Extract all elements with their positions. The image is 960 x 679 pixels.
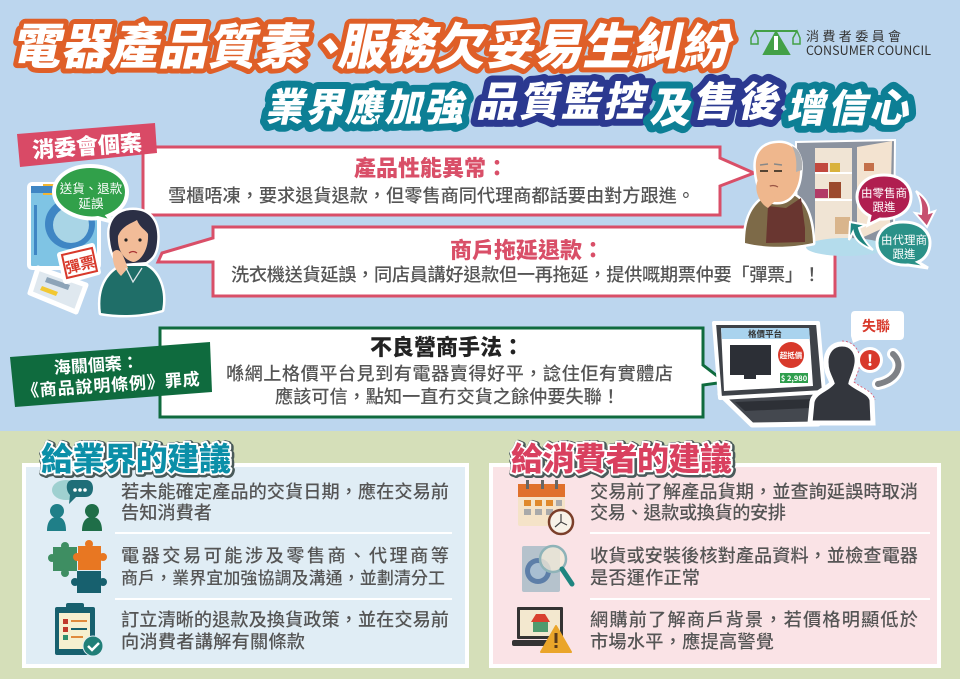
advice text 2: 電器交易可能涉及零售商、代理商等 [121, 542, 449, 568]
advice text 1: 若未能確定產品的交貨日期，應在交易前 [121, 478, 449, 504]
advice text 4: 交易、退款或換貨的安排 [590, 499, 786, 525]
advice text 6 [590, 606, 918, 654]
illustration: open fridge [796, 140, 895, 256]
heading: advice for the trade: 給業界的建議 [41, 434, 231, 480]
arrow: agent to retailer [849, 222, 873, 250]
advice text 4: 交易前了解產品貨期，並查詢延誤時取消 [590, 478, 918, 504]
title: 電器產品質素、服務欠妥易生糾紛 [8, 9, 741, 79]
advice text 5: 是否運作正常 [590, 564, 700, 590]
advice text 1 [121, 478, 449, 525]
illustration: washing machine [29, 184, 99, 268]
icon: checklist [55, 603, 103, 656]
speech bubble: retailer follow up: 跟進 [872, 199, 896, 215]
speech bubble: delayed delivery [54, 166, 127, 222]
illustration: laptop with price platform: 超抵價 [780, 350, 803, 361]
illustration: stamp and cheque [30, 246, 98, 312]
logo: consumer council: CONSUMER COUNCIL [806, 40, 931, 59]
subtitle [262, 69, 917, 134]
callout: bad trade practice [160, 328, 725, 417]
speech bubble: delayed delivery: 延誤 [78, 193, 104, 212]
advice text 6: 網購前了解商戶背景，若價格明顯低於 [590, 606, 918, 632]
illustration: stamp and cheque: 彈票 [63, 251, 97, 278]
heading: advice for the trade: 給業界的建議 [42, 435, 232, 481]
advice text 2 [121, 542, 449, 589]
illustration: silhouette person [810, 341, 875, 423]
illustration: worried old man [745, 143, 813, 247]
subtitle: 業界應加強 [262, 76, 473, 133]
panel: advice for the trade [24, 434, 467, 666]
ribbon: customs case: 海關個案： [53, 348, 139, 379]
advice text 3: 訂立清晰的退款及換貨政策，並在交易前 [121, 606, 449, 632]
callout: delayed refund: 洗衣機送貨延誤，同店員講好退款但一再拖延，提供嘅期票仲要「彈票」！ [231, 261, 821, 287]
icon: alert and phone [857, 347, 898, 384]
icon: washer and magnifier [522, 546, 572, 592]
arrow: retailer to agent [915, 191, 935, 227]
callout: bad trade practice: 喺網上格價平台見到有電器賣得好平，諗住佢有實體店 [226, 360, 673, 386]
subtitle: 增信心 [783, 77, 917, 134]
advice text 6: 市場水平，應提高警覺 [590, 628, 774, 654]
illustration: laptop with price platform: 格價平台 [748, 328, 782, 340]
advice text 2: 商戶，業界宜加強協調及溝通，並劃清分工 [121, 564, 445, 589]
advice text 5: 收貨或安裝後核對產品資料，並檢查電器 [590, 542, 918, 568]
speech bubble: agent follow up: 由代理商 [881, 232, 927, 248]
logo: consumer council [751, 26, 931, 59]
subtitle: 售後 [689, 69, 788, 128]
logo: consumer council: 消費者委員會 [806, 26, 901, 45]
callout: delayed refund [158, 227, 835, 296]
subtitle: 品質監控 [473, 69, 654, 128]
heading: advice for consumers: 給消費者的建議 [511, 434, 732, 480]
speech bubble: agent follow up: 跟進 [892, 246, 916, 262]
heading: advice for consumers: 給消費者的建議 [512, 435, 733, 481]
icon: discussion [47, 480, 102, 531]
callout: product performance: 雪櫃唔凍，要求退貨退款，但零售商同代理商都話要由對方跟進。 [168, 182, 695, 208]
speech bubble: agent follow up [877, 222, 930, 268]
speech bubble: lost contact [851, 311, 904, 343]
subtitle: 及 [646, 75, 700, 134]
illustration: laptop with price platform [714, 323, 824, 425]
ribbon: consumer council cases: 消委會個案 [31, 125, 143, 165]
speech bubble: delayed delivery: 送貨、退款 [60, 178, 123, 197]
callout: delayed refund: 商戶拖延退款： [450, 233, 604, 265]
ribbon: customs case [10, 342, 212, 407]
advice text 1: 告知消費者 [121, 499, 212, 525]
advice text 3: 向消費者講解有關條款 [121, 628, 305, 654]
callout: product performance [143, 147, 754, 215]
ribbon: customs case: 《商品說明條例》罪成 [21, 365, 200, 402]
speech bubble: retailer follow up: 由零售商 [861, 185, 907, 201]
speech bubble: lost contact: 失聯 [862, 316, 890, 336]
icon: online shop warning [512, 607, 571, 652]
callout: product performance: 產品性能異常： [354, 151, 508, 183]
speech bubble: retailer follow up [857, 175, 911, 225]
illustration: laptop with price platform: $ 2,980 [781, 373, 808, 384]
illustration: worried woman [100, 210, 163, 315]
callout: bad trade practice: 應該可信，點知一直冇交貨之餘仲要失聯！ [275, 383, 620, 409]
icon: calendar and clock [518, 480, 573, 534]
panel: advice for consumers [491, 434, 939, 666]
advice text 5 [590, 542, 918, 590]
advice text 3 [121, 606, 449, 654]
icon: puzzle [48, 540, 107, 593]
advice text 4 [590, 478, 918, 525]
icon: alert and phone: ! [867, 350, 873, 371]
callout: bad trade practice: 不良營商手法： [370, 330, 524, 362]
